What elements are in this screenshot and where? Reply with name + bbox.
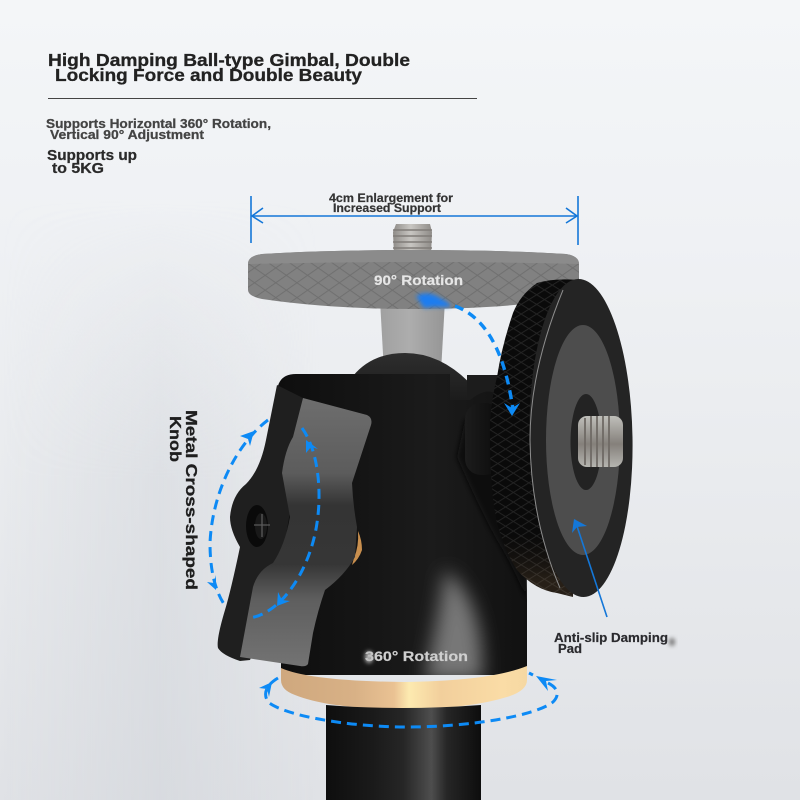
pole: [326, 705, 481, 800]
dimension label: 4cm Enlargement for: [329, 193, 454, 205]
label: 360 rotation: 360° Rotation: [365, 649, 468, 664]
knob dark wing: [218, 385, 303, 661]
white smudge: [365, 651, 373, 663]
body highlight: [425, 570, 482, 680]
axis cap: [465, 403, 501, 475]
anti-slip pad: [546, 325, 620, 555]
label: metal cross-shaped: Metal Cross-shaped: [182, 410, 199, 590]
pad hole: [570, 394, 602, 490]
arrow: knob inner arc: [250, 428, 319, 618]
knob screw head: [255, 513, 267, 539]
face: [527, 278, 635, 598]
subtitle: load capacity: to 5KG: [52, 160, 104, 177]
label: anti-slip pad: Pad: [558, 642, 582, 656]
title: High Damping Ball-type Gimbal, Double: [48, 50, 410, 70]
knob grey face: [240, 398, 372, 666]
arrow: 90 rotation: [455, 306, 520, 416]
label: 90 rotation: 90° Rotation: [374, 273, 463, 288]
cross knob: [218, 385, 372, 666]
title: Locking Force and Double Beauty: [55, 65, 362, 85]
gold ring: [281, 666, 527, 709]
gold bolt: [352, 531, 362, 565]
body: [277, 374, 527, 675]
mounting disk: [465, 278, 635, 598]
knurl shading: [490, 279, 577, 597]
face edge: [530, 290, 563, 588]
dimension arrow: [251, 196, 578, 245]
disk screw: [578, 416, 623, 467]
subtitle: rotation: Supports Horizontal 360° Rotation,: [46, 117, 271, 131]
grey smudge: [669, 638, 675, 646]
side shaft: [467, 375, 500, 410]
subtitle: load capacity: Supports up: [47, 147, 137, 164]
blue smudge: [416, 293, 450, 308]
body shadow under disk: [457, 420, 527, 600]
subtitle: rotation: Vertical 90° Adjustment: [50, 128, 205, 142]
arrow: base rotation: [259, 673, 557, 727]
ghost mount plate: [248, 224, 579, 372]
arrow: damping pad pointer: [572, 519, 607, 617]
knob screw hole: [246, 505, 268, 547]
knurled side: [490, 279, 577, 597]
label: anti-slip pad: Anti-slip Damping: [554, 631, 668, 645]
screw slot: [254, 514, 270, 537]
dimension label: Increased Support: [333, 203, 441, 215]
title rule: [48, 98, 477, 99]
background: [0, 362, 800, 800]
ball joint: [353, 353, 478, 420]
label: knob: Knob: [166, 416, 183, 462]
arrow: knob outer arc: [207, 420, 268, 607]
